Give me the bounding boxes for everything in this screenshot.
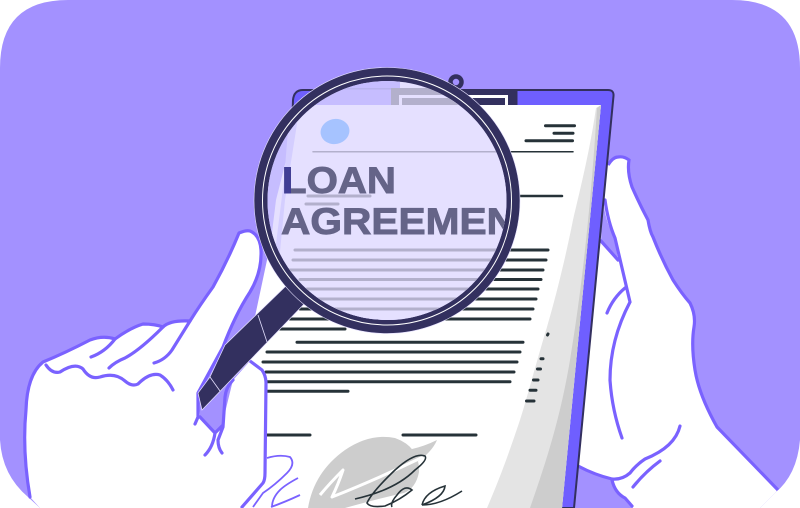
- finger crease lines: [46, 321, 190, 390]
- signature stamp: [308, 437, 437, 508]
- magnifying glass handle: [198, 282, 308, 410]
- magnifying glass lens: LOAN: [282, 160, 396, 201]
- right hand: [570, 157, 778, 508]
- paper sheet: [240, 105, 601, 508]
- clipboard board: [280, 76, 614, 508]
- clipboard clip: [399, 95, 508, 106]
- magnifying glass lens: [254, 68, 521, 334]
- clipboard peg: [450, 76, 462, 88]
- magnified blue seal: [320, 118, 350, 144]
- magnified background: [260, 80, 400, 320]
- handwritten signature: [355, 455, 462, 507]
- contract text lines: [263, 126, 574, 435]
- magnifying glass lens: AGREEMEN: [281, 201, 516, 242]
- loan agreement heading: LOAN: [282, 160, 396, 201]
- magnified document lines: [290, 152, 510, 309]
- blue signature: [253, 456, 300, 507]
- left hand: [25, 231, 266, 508]
- page curl shading: [487, 105, 601, 508]
